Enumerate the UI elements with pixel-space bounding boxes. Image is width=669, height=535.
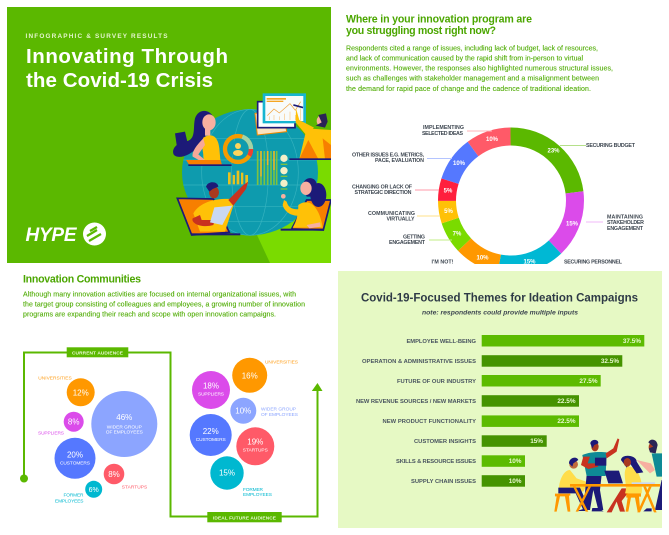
heading: struggle question: you struggling most right now? [346, 25, 496, 37]
text block: respondents summary: environments. However, the responses also highlighted numerous structural issues, [346, 66, 613, 72]
bubbles: current audience: EMPLOYEES [55, 498, 84, 504]
bubbles: current audience: STARTUPS [122, 484, 147, 490]
bar chart: themes [356, 335, 644, 487]
heading: innovation communities: Innovation Communities [23, 274, 141, 286]
panel: hero cover [7, 7, 331, 263]
data screens [255, 93, 306, 135]
bubbles: current audience: CUSTOMERS [60, 460, 90, 466]
logo: HYPE [26, 222, 106, 246]
bubbles: ideal future audience: STARTUPS [243, 448, 268, 454]
donut values: 10% [453, 161, 466, 167]
person: man top right [289, 104, 331, 160]
bubbles: ideal future audience: EMPLOYEES [243, 492, 272, 498]
bubbles: current audience: 20% [67, 451, 83, 460]
overline: INFOGRAPHIC & SURVEY RESULTS [26, 33, 168, 40]
bubbles: ideal future audience: OF EMPLOYEES [261, 412, 298, 418]
bubbles: ideal future audience: SUPPLIERS [198, 392, 224, 398]
bubbles: current audience: 6% [89, 487, 99, 494]
panel: ideation themes [338, 271, 665, 528]
donut leader lines [415, 131, 603, 240]
tag: ideal future audience: IDEAL FUTURE AUDIENCE [213, 515, 277, 521]
bubbles: current audience: WIDER GROUP [107, 424, 142, 430]
bubbles: ideal future audience: CUSTOMERS [196, 437, 226, 443]
bar chart: themes: 15% [530, 438, 543, 445]
person: man bottom left [177, 182, 248, 235]
bar chart: themes: NEW REVENUE SOURCES / NEW MARKETS [356, 399, 476, 405]
light green corner [257, 158, 331, 263]
donut labels: I'M NOT! [432, 260, 454, 266]
donut labels: SECURING PERSONNEL [564, 260, 623, 266]
donut labels: MAINTAINING [607, 214, 643, 220]
donut values: 10% [476, 256, 489, 262]
illustration: team at table [554, 438, 665, 512]
donut labels: SECURING BUDGET [586, 143, 636, 149]
bar chart: themes: CUSTOMER INSIGHTS [414, 439, 476, 445]
bar chart: themes: EMPLOYEE WELL-BEING [406, 339, 476, 345]
table [570, 482, 660, 512]
tag: ideal future audience [207, 512, 282, 522]
main title: Innovating Through [26, 45, 228, 68]
bubbles: ideal future audience: 22% [203, 427, 219, 436]
bubbles: ideal future audience [190, 358, 298, 498]
tag: current audience [67, 347, 128, 357]
bar graphics [228, 151, 277, 185]
bubbles: ideal future audience: UNIVERSITIES [265, 359, 298, 365]
bubbles: ideal future audience: 19% [247, 438, 263, 447]
donut labels: CHANGING OR LACK OF [352, 184, 413, 190]
tag: current audience: CURRENT AUDIENCE [72, 350, 124, 356]
bar chart: themes: NEW PRODUCT FUNCTIONALITY [382, 419, 476, 425]
heading: struggle question: Where in your innovation program are [346, 14, 532, 26]
bar chart: themes: 27.5% [579, 378, 598, 385]
logo: HYPE: HYPE [26, 225, 78, 246]
donut labels: GETTING [403, 234, 425, 240]
donut values: 5% [444, 209, 454, 215]
main title: the Covid-19 Crisis [26, 69, 213, 92]
donut labels: ENGAGEMENT [389, 240, 426, 246]
chart title: Covid-19-Focused Themes for Ideation Campaigns [361, 292, 638, 304]
status icons [280, 155, 288, 190]
bar chart: themes: SUPPLY CHAIN ISSUES [411, 479, 476, 485]
bubbles: current audience: SUPPLIERS [38, 430, 64, 436]
donut labels: STRATEGIC DIRECTION [354, 190, 412, 196]
donut labels: IMPLEMENTING [423, 125, 464, 131]
bar chart: themes: 22.5% [557, 398, 576, 405]
globe [182, 109, 318, 235]
donut values [444, 137, 579, 266]
text block: communities summary: the target group consisting of colleagues and employees, a growing number of innovation [23, 302, 305, 308]
donut labels: STAKEHOLDER [607, 220, 644, 226]
bubbles: ideal future audience: 10% [235, 406, 251, 415]
text block: respondents summary: and lack of communication caused by the rapid shift from in-person to virtual [346, 56, 583, 62]
bubbles: current audience: 8% [68, 418, 79, 427]
chart: audience bubbles [20, 347, 322, 522]
bar chart: themes: FUTURE OF OUR INDUSTRY [397, 379, 476, 385]
chart note: note: respondents could provide multiple inputs [422, 310, 578, 316]
bar chart: themes: 22.5% [557, 418, 576, 425]
donut labels: PACE, EVALUATION [375, 158, 424, 164]
person: woman bottom right [281, 178, 331, 231]
text block: respondents summary: such as challenges with stakeholder management and a misalignment between [346, 76, 599, 82]
donut values: 23% [547, 148, 560, 154]
text block: communities summary: Although many innovation activities are focused on internal organizational issues, with [23, 292, 296, 298]
bubbles: current audience: FORMER [64, 492, 84, 498]
bar chart: themes: 10% [509, 478, 522, 485]
chart: struggle donut [352, 125, 644, 266]
donut values: 15% [523, 260, 536, 266]
donut values: 10% [486, 137, 499, 143]
bubbles: current audience: UNIVERSITIES [38, 376, 72, 382]
text block: respondents summary: Respondents cited a range of issues, including lack of budget, lack of resources, [346, 46, 598, 52]
donut labels [352, 125, 644, 266]
text block: respondents summary: the demand for rapid pace of change and the cadence of traditional ideation. [346, 86, 591, 93]
person: seated man [554, 458, 590, 512]
donut labels: ENGAGEMENT [607, 226, 644, 232]
person: woman left [173, 111, 232, 166]
donut labels: SELECTED IDEAS [422, 131, 463, 137]
bubbles: current audience: 8% [108, 470, 120, 479]
donut labels: OTHER ISSUES E.G. METRICS, [352, 152, 425, 158]
person: seated woman [604, 456, 643, 512]
bubbles: current audience: 12% [73, 388, 89, 397]
bubbles: current audience: 46% [116, 413, 132, 422]
donut labels: COMMUNICATING [368, 211, 415, 217]
bar chart: themes: 37.5% [623, 338, 641, 345]
person: man right [637, 440, 665, 511]
radial chart [225, 136, 251, 162]
bubbles: ideal future audience: WIDER GROUP [261, 406, 296, 412]
bubbles: ideal future audience: 15% [219, 469, 235, 478]
illustration: people around globe [173, 93, 331, 235]
bubbles: ideal future audience: FORMER [243, 487, 264, 493]
donut values: 15% [566, 222, 579, 228]
bar chart: themes: OPERATION & ADMINISTRATIVE ISSUES [362, 359, 476, 365]
bubbles: current audience: OF EMPLOYEES [106, 430, 143, 436]
bubbles: current audience [38, 376, 157, 504]
bar chart: themes: 10% [509, 458, 522, 465]
bubbles: ideal future audience: 16% [242, 371, 258, 380]
text block: communities summary: programs are expanding their reach and scope with open innovation campaigns. [23, 312, 276, 318]
person: standing man [577, 438, 619, 511]
donut values: 5% [444, 188, 453, 194]
bar chart: themes: 32.5% [601, 358, 619, 365]
audience frame arrow [20, 352, 322, 516]
donut values: 7% [453, 232, 462, 238]
bubbles: ideal future audience: 18% [203, 382, 219, 391]
bar chart: themes: SKILLS & RESOURCE ISSUES [396, 459, 476, 465]
donut labels: VIRTUALLY [386, 216, 415, 222]
